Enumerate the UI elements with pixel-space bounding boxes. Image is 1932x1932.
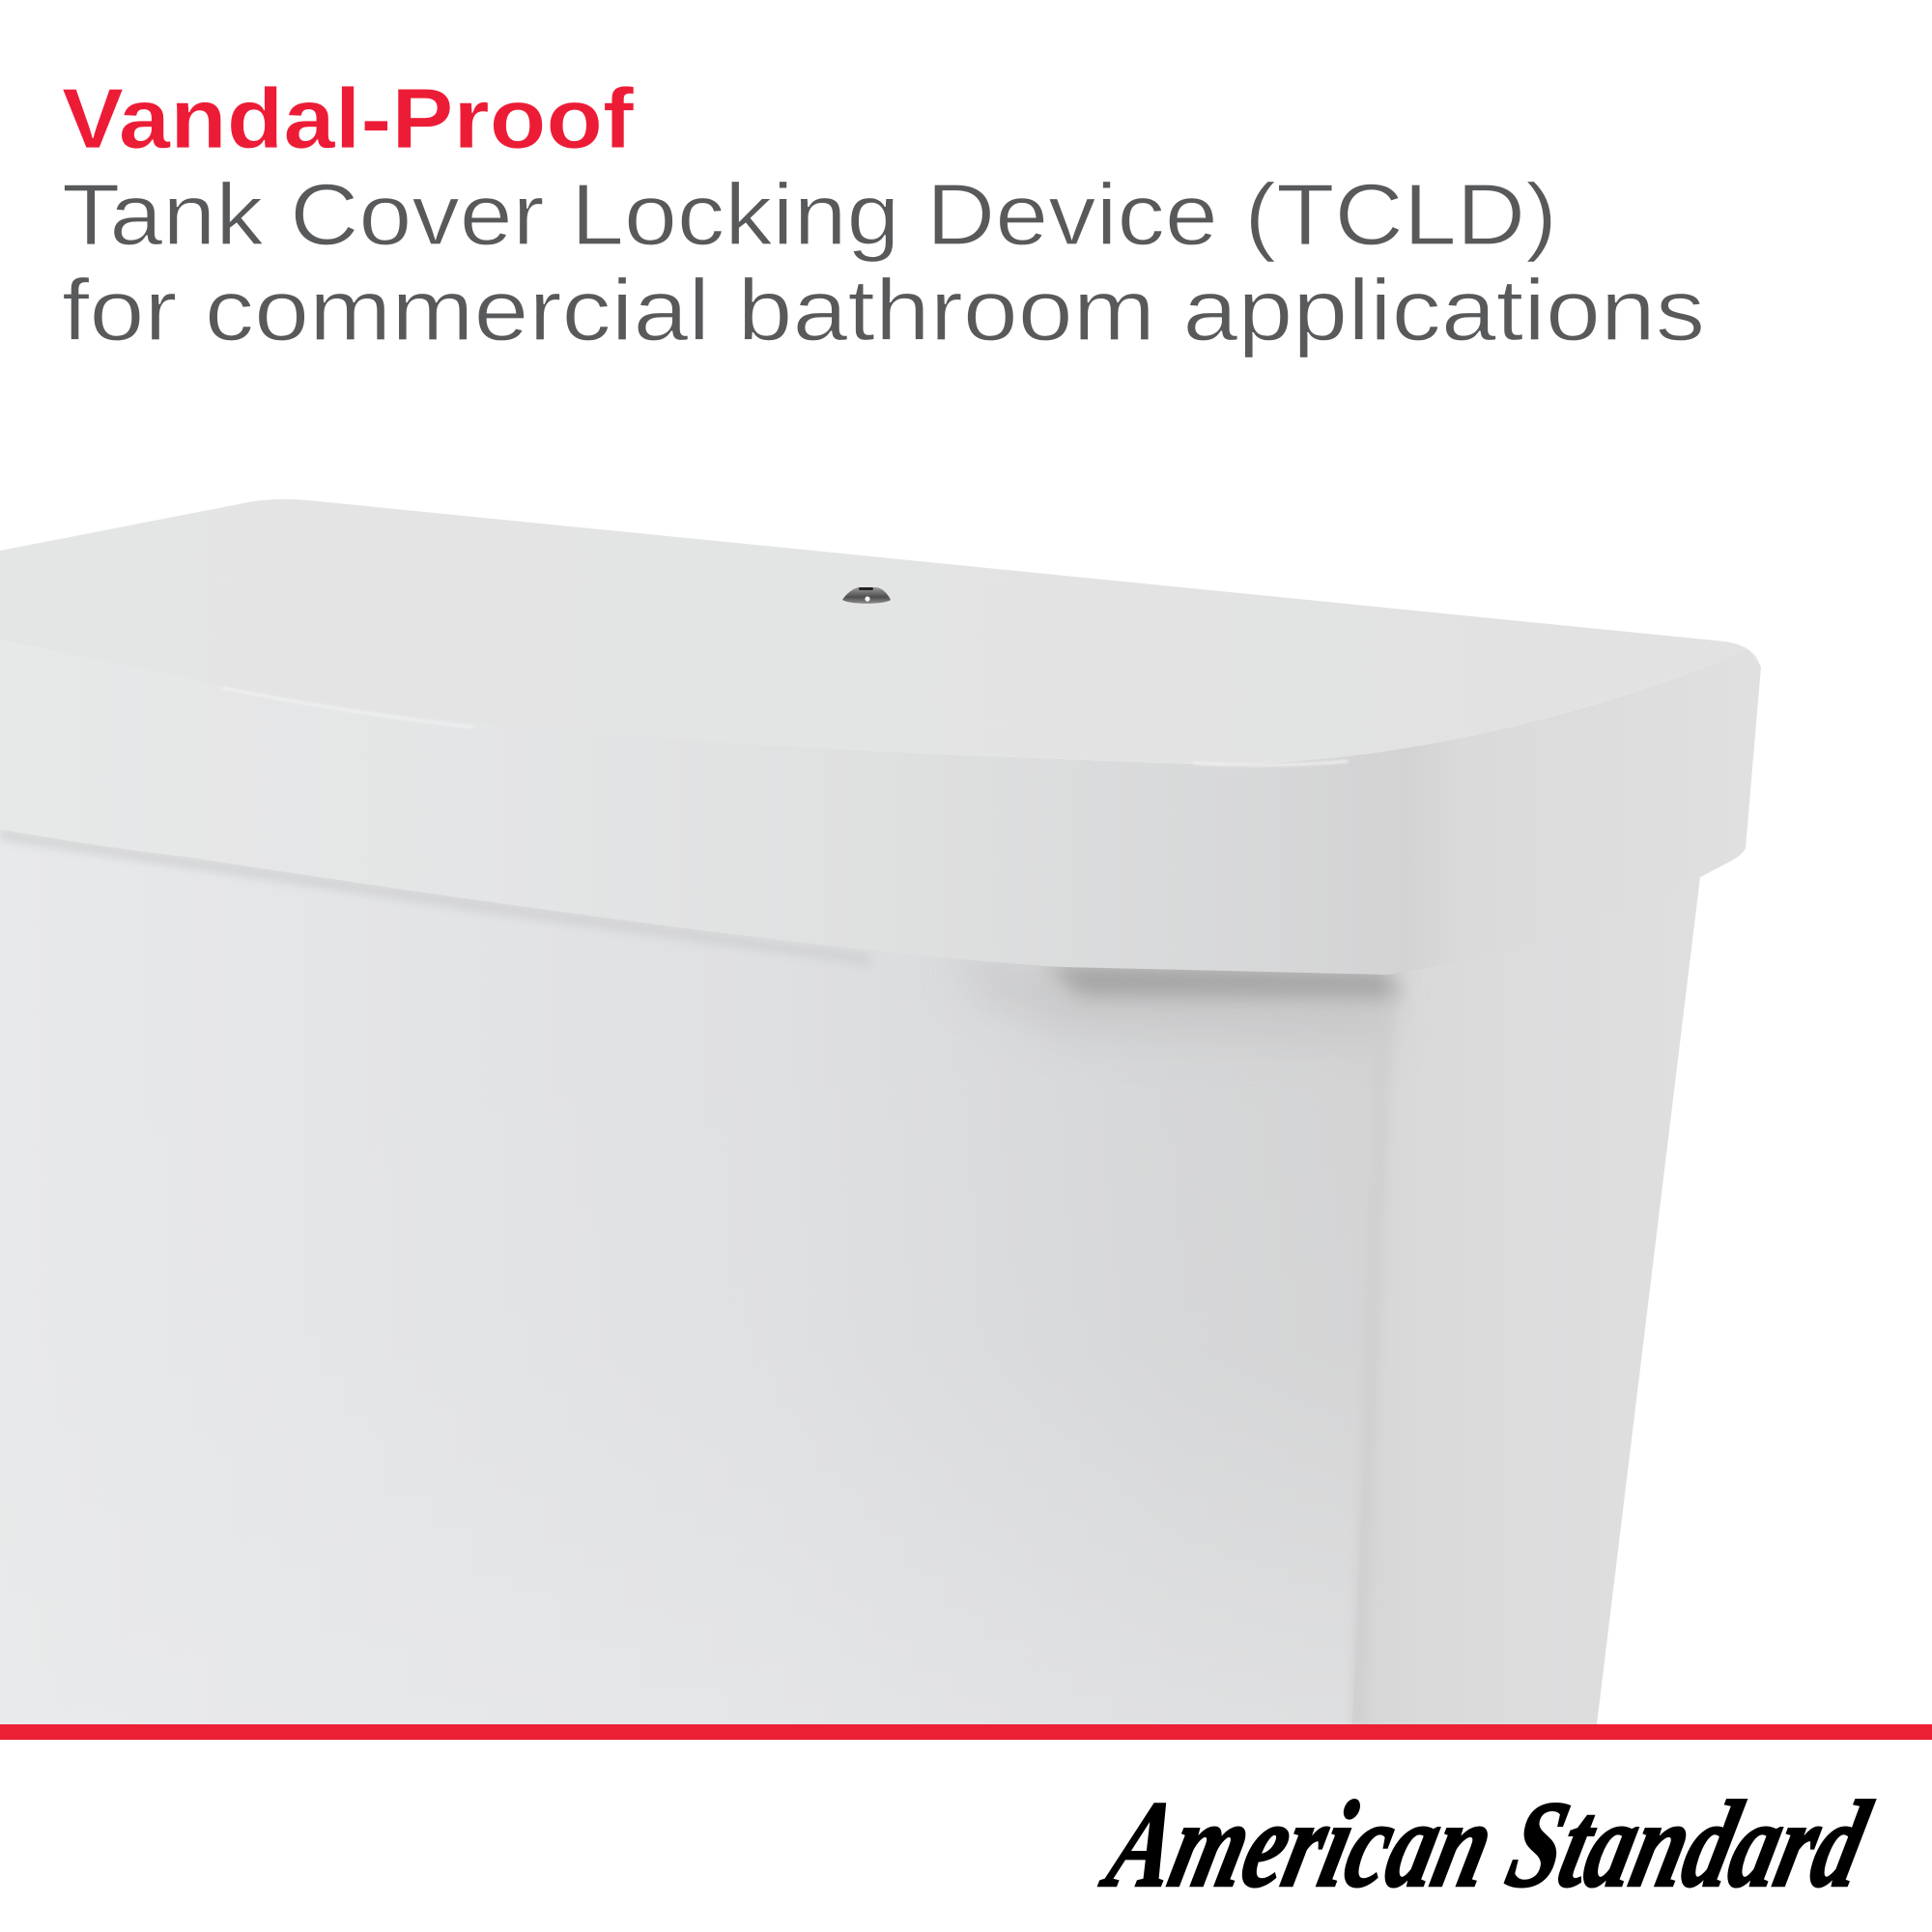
shadow under lid <box>0 829 1401 1043</box>
red divider bar <box>0 1724 1932 1740</box>
lid rim <box>0 633 1761 975</box>
tank front face <box>0 821 1430 1724</box>
tank corner fold <box>1350 1005 1393 1724</box>
subtitle line: Tank Cover Locking Device: Tank Cover Locking Device (TCLD) <box>62 167 1557 264</box>
lid edge highlights <box>222 688 1348 765</box>
subtitle line: for commercial bathroom applications: for commercial bathroom applications <box>62 263 1705 359</box>
tank side face <box>1352 850 1700 1724</box>
lid top plane <box>0 499 1760 764</box>
toilet tank <box>0 499 1761 1724</box>
title: Vandal-Proof: Vandal-Proof <box>62 71 635 166</box>
tank front vertical light <box>0 821 1430 1724</box>
icon: locking screw <box>842 587 891 604</box>
